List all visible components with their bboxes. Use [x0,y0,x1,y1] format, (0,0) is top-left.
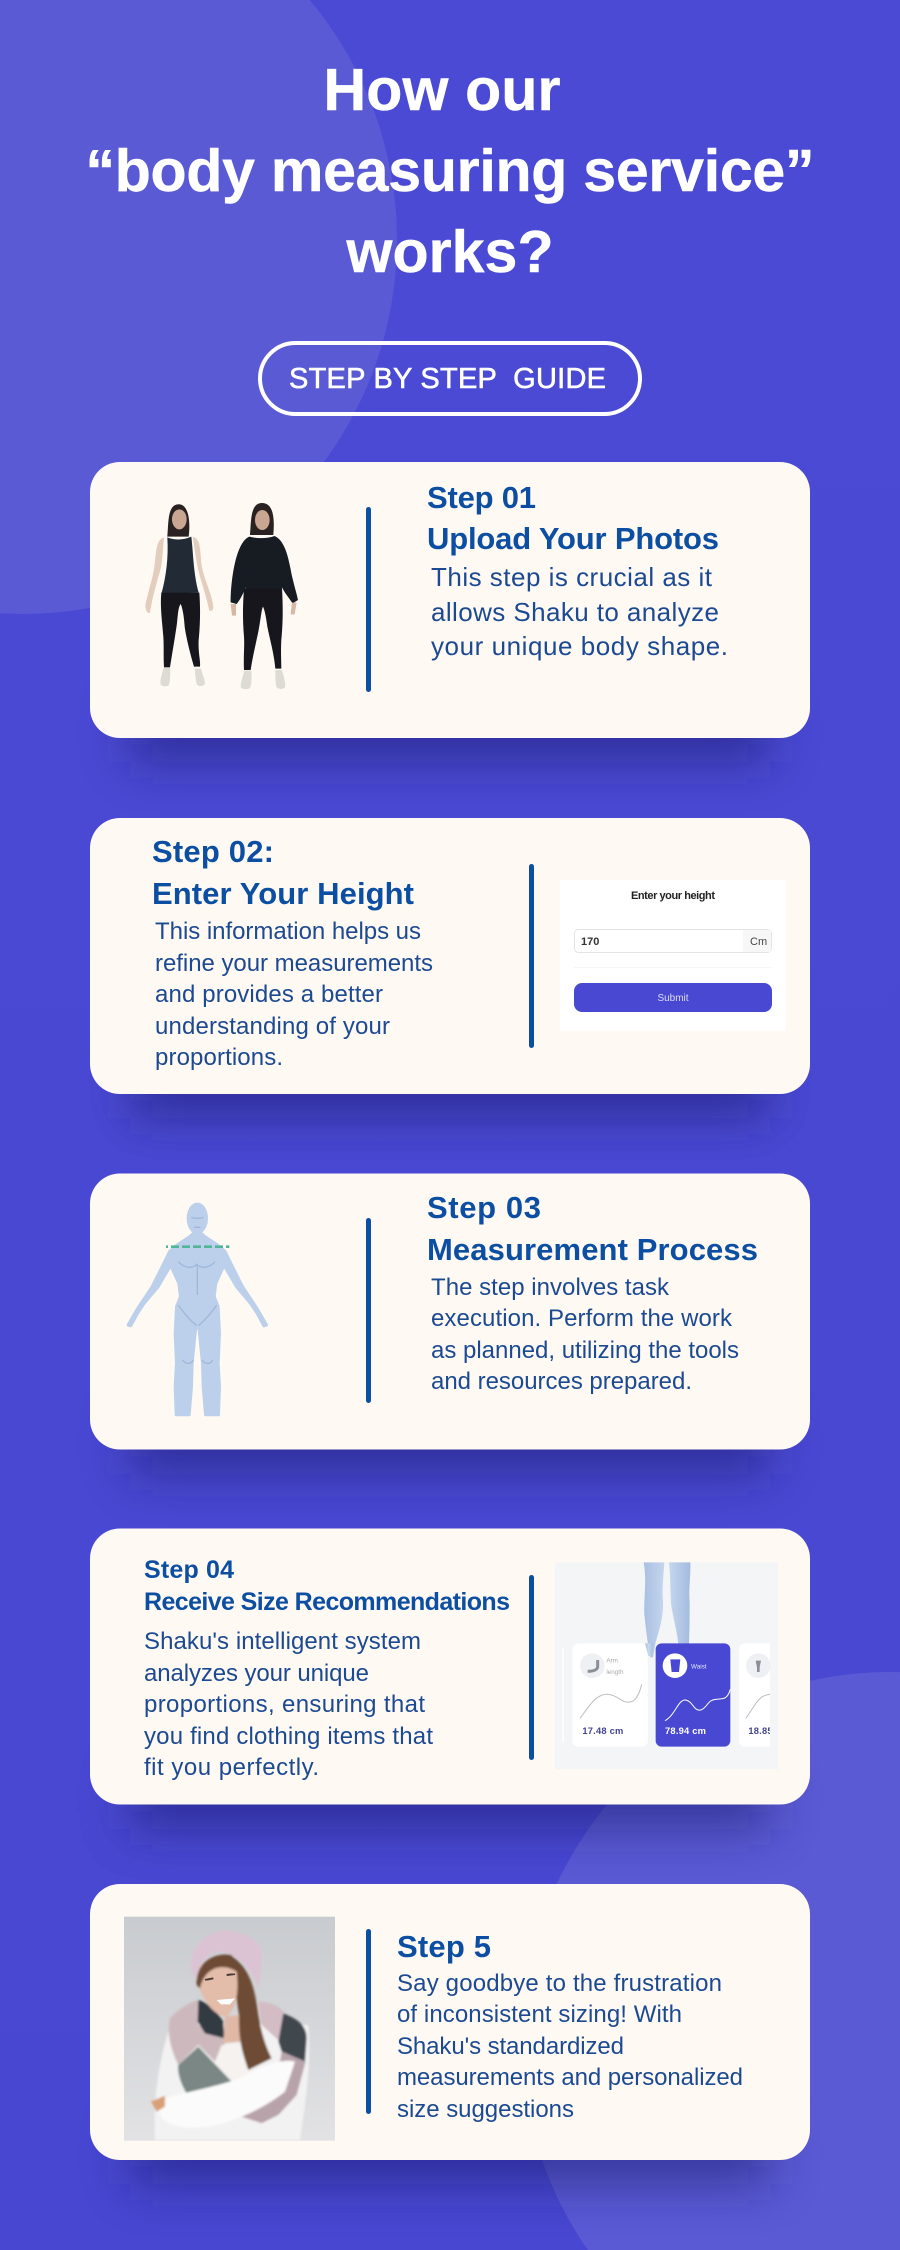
step 04 text: proportions, ensuring that [144,1691,425,1718]
measurement results screenshot: Waist [691,1663,707,1670]
panel: step 01 [90,462,810,738]
form screenshot: enter your height: 170 [581,936,599,948]
step 04 text: Step 04 [144,1556,234,1584]
title: How our [324,57,561,123]
measurement results screenshot: Arm [606,1657,618,1664]
panel: step 04 [90,1528,810,1804]
icon: 3D body model with shoulder line [128,1204,266,1415]
title: works? [346,219,554,285]
step 04 text: Receive Size Recommendations [144,1588,510,1616]
step 02 text: Step 02: [152,834,274,869]
step 05 text: measurements and personalized [397,2064,743,2091]
step 02 text: proportions. [155,1044,283,1071]
form screenshot: enter your height [560,880,786,1031]
measurement results screenshot: 18.85 cm [748,1726,789,1736]
measurement results screenshot: 17.48 cm [582,1726,623,1736]
icon: two women standing [145,503,298,689]
measurement results screenshot: length [606,1669,624,1676]
divider [366,1929,371,2114]
panel: step 03 [90,1174,810,1450]
step 05 text: size suggestions [397,2096,574,2123]
divider [366,507,371,692]
form screenshot: enter your height: Cm [750,936,767,948]
badge: step by step guide [260,343,640,414]
step 02 text: understanding of your [155,1013,390,1040]
step 05 text: of inconsistent sizing! With [397,2001,682,2028]
form screenshot: enter your height: Enter your height [631,890,715,902]
step 01 text [427,480,728,661]
title: “body measuring service” [86,138,814,204]
divider [366,1218,371,1403]
step 01 text: This step is crucial as it [431,562,713,592]
step 02 text: This information helps us [155,918,421,945]
step 04 text: Shaku's intelligent system [144,1628,421,1655]
panel: step 05 [90,1884,810,2160]
step 01 text: your unique body shape. [431,631,728,661]
step 02 text: refine your measurements [155,950,433,977]
step 03 text: Step 03 [427,1190,541,1225]
step 02 text [152,834,433,1071]
step 01 text: allows Shaku to analyze [431,597,719,627]
step 04 text [144,1556,510,1781]
step 05 text: Say goodbye to the frustration [397,1970,722,1997]
measurement results screenshot: 78.94 cm [665,1726,706,1736]
step 02 text: Enter Your Height [152,876,414,911]
step 01 text: Upload Your Photos [427,521,719,556]
form screenshot: enter your height: Submit [657,993,689,1004]
card shadows [130,700,770,2184]
step 04 text: fit you perfectly. [144,1754,319,1781]
step 05 text: Shaku's standardized [397,2033,624,2060]
step 04 text: analyzes your unique [144,1660,369,1687]
step 04 text: you find clothing items that [144,1723,433,1750]
divider [529,1575,534,1760]
step 03 text: as planned, utilizing the tools [431,1337,739,1364]
step 03 text: execution. Perform the work [431,1305,733,1332]
step 02 text: and provides a better [155,981,383,1008]
step 05 text: Step 5 [397,1929,491,1964]
step 05 text [397,1929,743,2123]
measurement results screenshot [555,1562,789,1769]
badge: step by step guide: STEP BY STEP GUIDE [289,363,606,395]
panel: step 02 [90,818,810,1094]
photo: smiling woman in pink hat [124,1917,335,2141]
step 03 text: Measurement Process [427,1232,758,1267]
step 03 text [427,1190,758,1395]
step 03 text: The step involves task [431,1274,670,1301]
step 03 text: and resources prepared. [431,1368,692,1395]
divider [529,864,534,1048]
title [86,57,814,285]
step 01 text: Step 01 [427,480,536,515]
